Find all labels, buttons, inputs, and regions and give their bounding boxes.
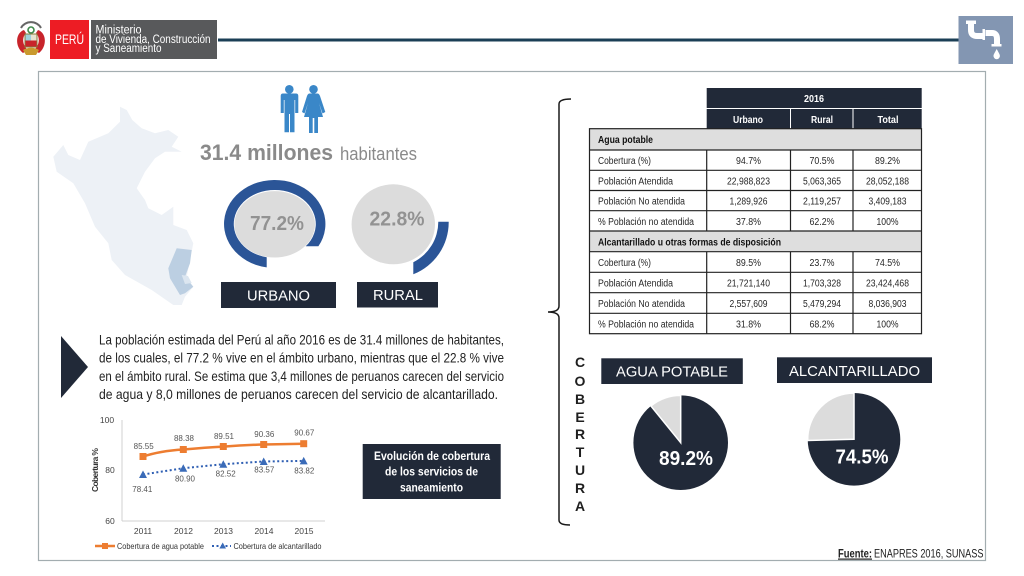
table header: Total: [878, 115, 899, 126]
heading: population: habitantes: [340, 144, 417, 164]
vertical label: cobertura: O: [575, 373, 586, 389]
logo: ministry block: Ministerio: [96, 24, 142, 36]
label: rural: RURAL: [373, 287, 423, 304]
logo: PERÚ red block: [50, 20, 89, 59]
section: alcantarillado: [598, 238, 909, 330]
label: alcantarillado: ALCANTARILLADO: [789, 363, 920, 380]
section: agua potable: 22,988,823: [727, 176, 770, 187]
section: alcantarillado: Alcantarillado u otras formas de disposición: [598, 238, 781, 248]
label: agua potable: [601, 358, 743, 384]
section: alcantarillado: % Población no atendida: [598, 320, 694, 330]
text block: summary paragraph: en el ámbito rural. Se estima que 3,4 millones de peruanos carecen del servicio: [99, 368, 504, 384]
chart legend: Cobertura de alcantarillado: [234, 541, 322, 551]
line chart: coverage evolution: 2013: [214, 526, 233, 536]
pie chart: alcantarillado: 74.5%: [836, 446, 889, 468]
text block: summary paragraph: La población estimada del Perú al año 2016 es de 31.4 millones de habitantes,: [99, 332, 504, 348]
vertical label: cobertura: R: [575, 426, 585, 442]
section: alcantarillado: 2,557,609: [730, 299, 768, 310]
section: agua potable: 62.2%: [810, 217, 835, 228]
section: agua potable: 5,063,365: [803, 176, 841, 187]
bracket: [548, 99, 571, 525]
line chart: coverage evolution: 80: [105, 465, 115, 475]
callout: coverage evolution: Evolución de cobertura: [374, 449, 490, 463]
vertical label: cobertura: A: [575, 498, 585, 514]
line chart: coverage evolution: 60: [105, 516, 115, 526]
section: alcantarillado: 8,036,903: [868, 299, 907, 310]
section: alcantarillado: 31.8%: [736, 320, 761, 330]
line chart: coverage evolution: 2015: [295, 526, 314, 536]
series: alcantarillado: 83.57: [254, 465, 275, 474]
series: alcantarillado: [132, 457, 315, 494]
logo: ministry block: y Saneamiento: [96, 43, 162, 55]
heading: population: [200, 140, 417, 165]
chart legend: Cobertura de agua potable: [117, 541, 204, 551]
section: agua potable: Población No atendida: [598, 196, 685, 208]
series: alcantarillado: 78.41: [132, 485, 153, 494]
label: agua potable: AGUA POTABLE: [616, 364, 728, 381]
line chart: coverage evolution: 2012: [174, 526, 193, 536]
arrow: chevron: [61, 336, 88, 398]
series: agua potable: 90.36: [254, 430, 275, 439]
vertical label: cobertura: T: [576, 444, 585, 460]
vertical label: cobertura: R: [575, 480, 585, 496]
table header: Urbano: [733, 115, 763, 126]
section: agua potable: 3,409,183: [868, 196, 907, 208]
logo: PERÚ red block: PERÚ: [55, 32, 84, 47]
table: coverage 2016: [590, 88, 922, 334]
header bar: [17, 16, 1013, 64]
main frame: [38, 72, 986, 560]
label: urbano: [221, 282, 336, 308]
section: agua potable: % Población no atendida: [598, 217, 694, 228]
map of Peru: [53, 107, 193, 305]
series: agua potable: 90.67: [294, 429, 315, 438]
section: alcantarillado: 21,721,140: [727, 278, 770, 290]
series: agua potable: 89.51: [214, 432, 235, 441]
gauge: urbano: [224, 180, 325, 267]
logo: ministry block: de Vivienda, Construcción: [96, 34, 210, 46]
vertical label: cobertura: [575, 354, 586, 514]
section: agua potable: 28,052,188: [866, 176, 909, 187]
line chart: coverage evolution: 2014: [255, 526, 274, 536]
pie chart: agua potable: [633, 395, 728, 490]
section: alcantarillado: Población No atendida: [598, 299, 685, 310]
section: agua potable: Cobertura (%): [598, 156, 651, 167]
section: alcantarillado: 68.2%: [810, 320, 835, 330]
icon: national crest: [17, 22, 45, 55]
line chart: coverage evolution: 100: [100, 415, 114, 425]
source note: ENAPRES 2016, SUNASS: [874, 546, 984, 560]
section: alcantarillado: Cobertura (%): [598, 258, 651, 269]
text block: summary paragraph: de agua y 8,0 millones de peruanos carecen del servicio de alcantarillado.: [99, 386, 498, 402]
series: agua potable: 88.38: [174, 434, 195, 443]
icon: faucet: [958, 16, 1013, 64]
section: alcantarillado: Población Atendida: [598, 278, 673, 290]
header rule: [218, 38, 959, 42]
vertical label: cobertura: E: [575, 409, 585, 425]
series: alcantarillado: 82.52: [216, 469, 236, 478]
callout: coverage evolution: saneamiento: [400, 481, 463, 495]
source note: [838, 546, 984, 560]
table header: Rural: [811, 115, 833, 126]
section: agua potable: 100%: [876, 217, 899, 228]
heading: population: 31.4 millones: [200, 140, 333, 165]
section: agua potable: 37.8%: [736, 217, 761, 228]
text block: summary paragraph: de los cuales, el 77.2 % vive en el ámbito urbano, mientras que el 22.8 % vive: [99, 350, 504, 366]
section: agua potable: Población Atendida: [598, 176, 673, 187]
section: alcantarillado: 23,424,468: [866, 278, 909, 290]
section: agua potable: 1,289,926: [730, 196, 768, 208]
section: alcantarillado: 1,703,328: [803, 278, 841, 290]
callout: coverage evolution: de los servicios de: [385, 465, 478, 479]
line chart: coverage evolution: Cobertura %: [90, 448, 100, 492]
section: agua potable: Agua potable: [598, 135, 653, 146]
section: agua potable: 89.2%: [875, 156, 900, 167]
gauge: rural: [352, 184, 449, 274]
section: alcantarillado: 100%: [876, 320, 899, 330]
text block: summary paragraph: [99, 332, 504, 402]
chart legend: [95, 541, 322, 551]
series: alcantarillado: 80.90: [175, 474, 196, 483]
map: highlighted region: [168, 248, 193, 295]
line chart: coverage evolution: [90, 415, 325, 551]
label: urbano: URBANO: [247, 288, 310, 304]
logo: ministry block: [91, 20, 217, 59]
section: agua potable: 2,119,257: [803, 196, 841, 208]
source note: Fuente:: [838, 546, 872, 560]
icon: man and woman: [281, 85, 325, 133]
vertical label: cobertura: B: [575, 391, 585, 407]
series: agua potable: 85.55: [134, 442, 154, 451]
series: agua potable: [134, 429, 315, 460]
pie chart: agua potable: 89.2%: [659, 448, 713, 470]
section: agua potable: 70.5%: [810, 156, 835, 167]
table header: 2016: [804, 94, 824, 105]
series: alcantarillado: 83.82: [294, 467, 315, 476]
section: agua potable: [598, 135, 909, 228]
table header: [707, 88, 922, 129]
section: alcantarillado: 5,479,294: [803, 299, 841, 310]
callout: coverage evolution: [363, 444, 501, 499]
table grid: [590, 129, 922, 334]
section: alcantarillado: 74.5%: [875, 258, 900, 269]
pie chart: alcantarillado: [808, 393, 900, 486]
gauge: rural: 22.8%: [370, 209, 425, 231]
section: agua potable: 94.7%: [736, 156, 761, 167]
vertical label: cobertura: U: [575, 462, 585, 478]
section: alcantarillado: 89.5%: [736, 258, 761, 269]
line chart: coverage evolution: 2011: [134, 526, 152, 536]
label: rural: [357, 282, 438, 308]
vertical label: cobertura: C: [575, 354, 585, 370]
label: alcantarillado: [777, 357, 932, 383]
section: alcantarillado: 23.7%: [810, 258, 835, 269]
gauge: urbano: 77.2%: [250, 213, 304, 235]
